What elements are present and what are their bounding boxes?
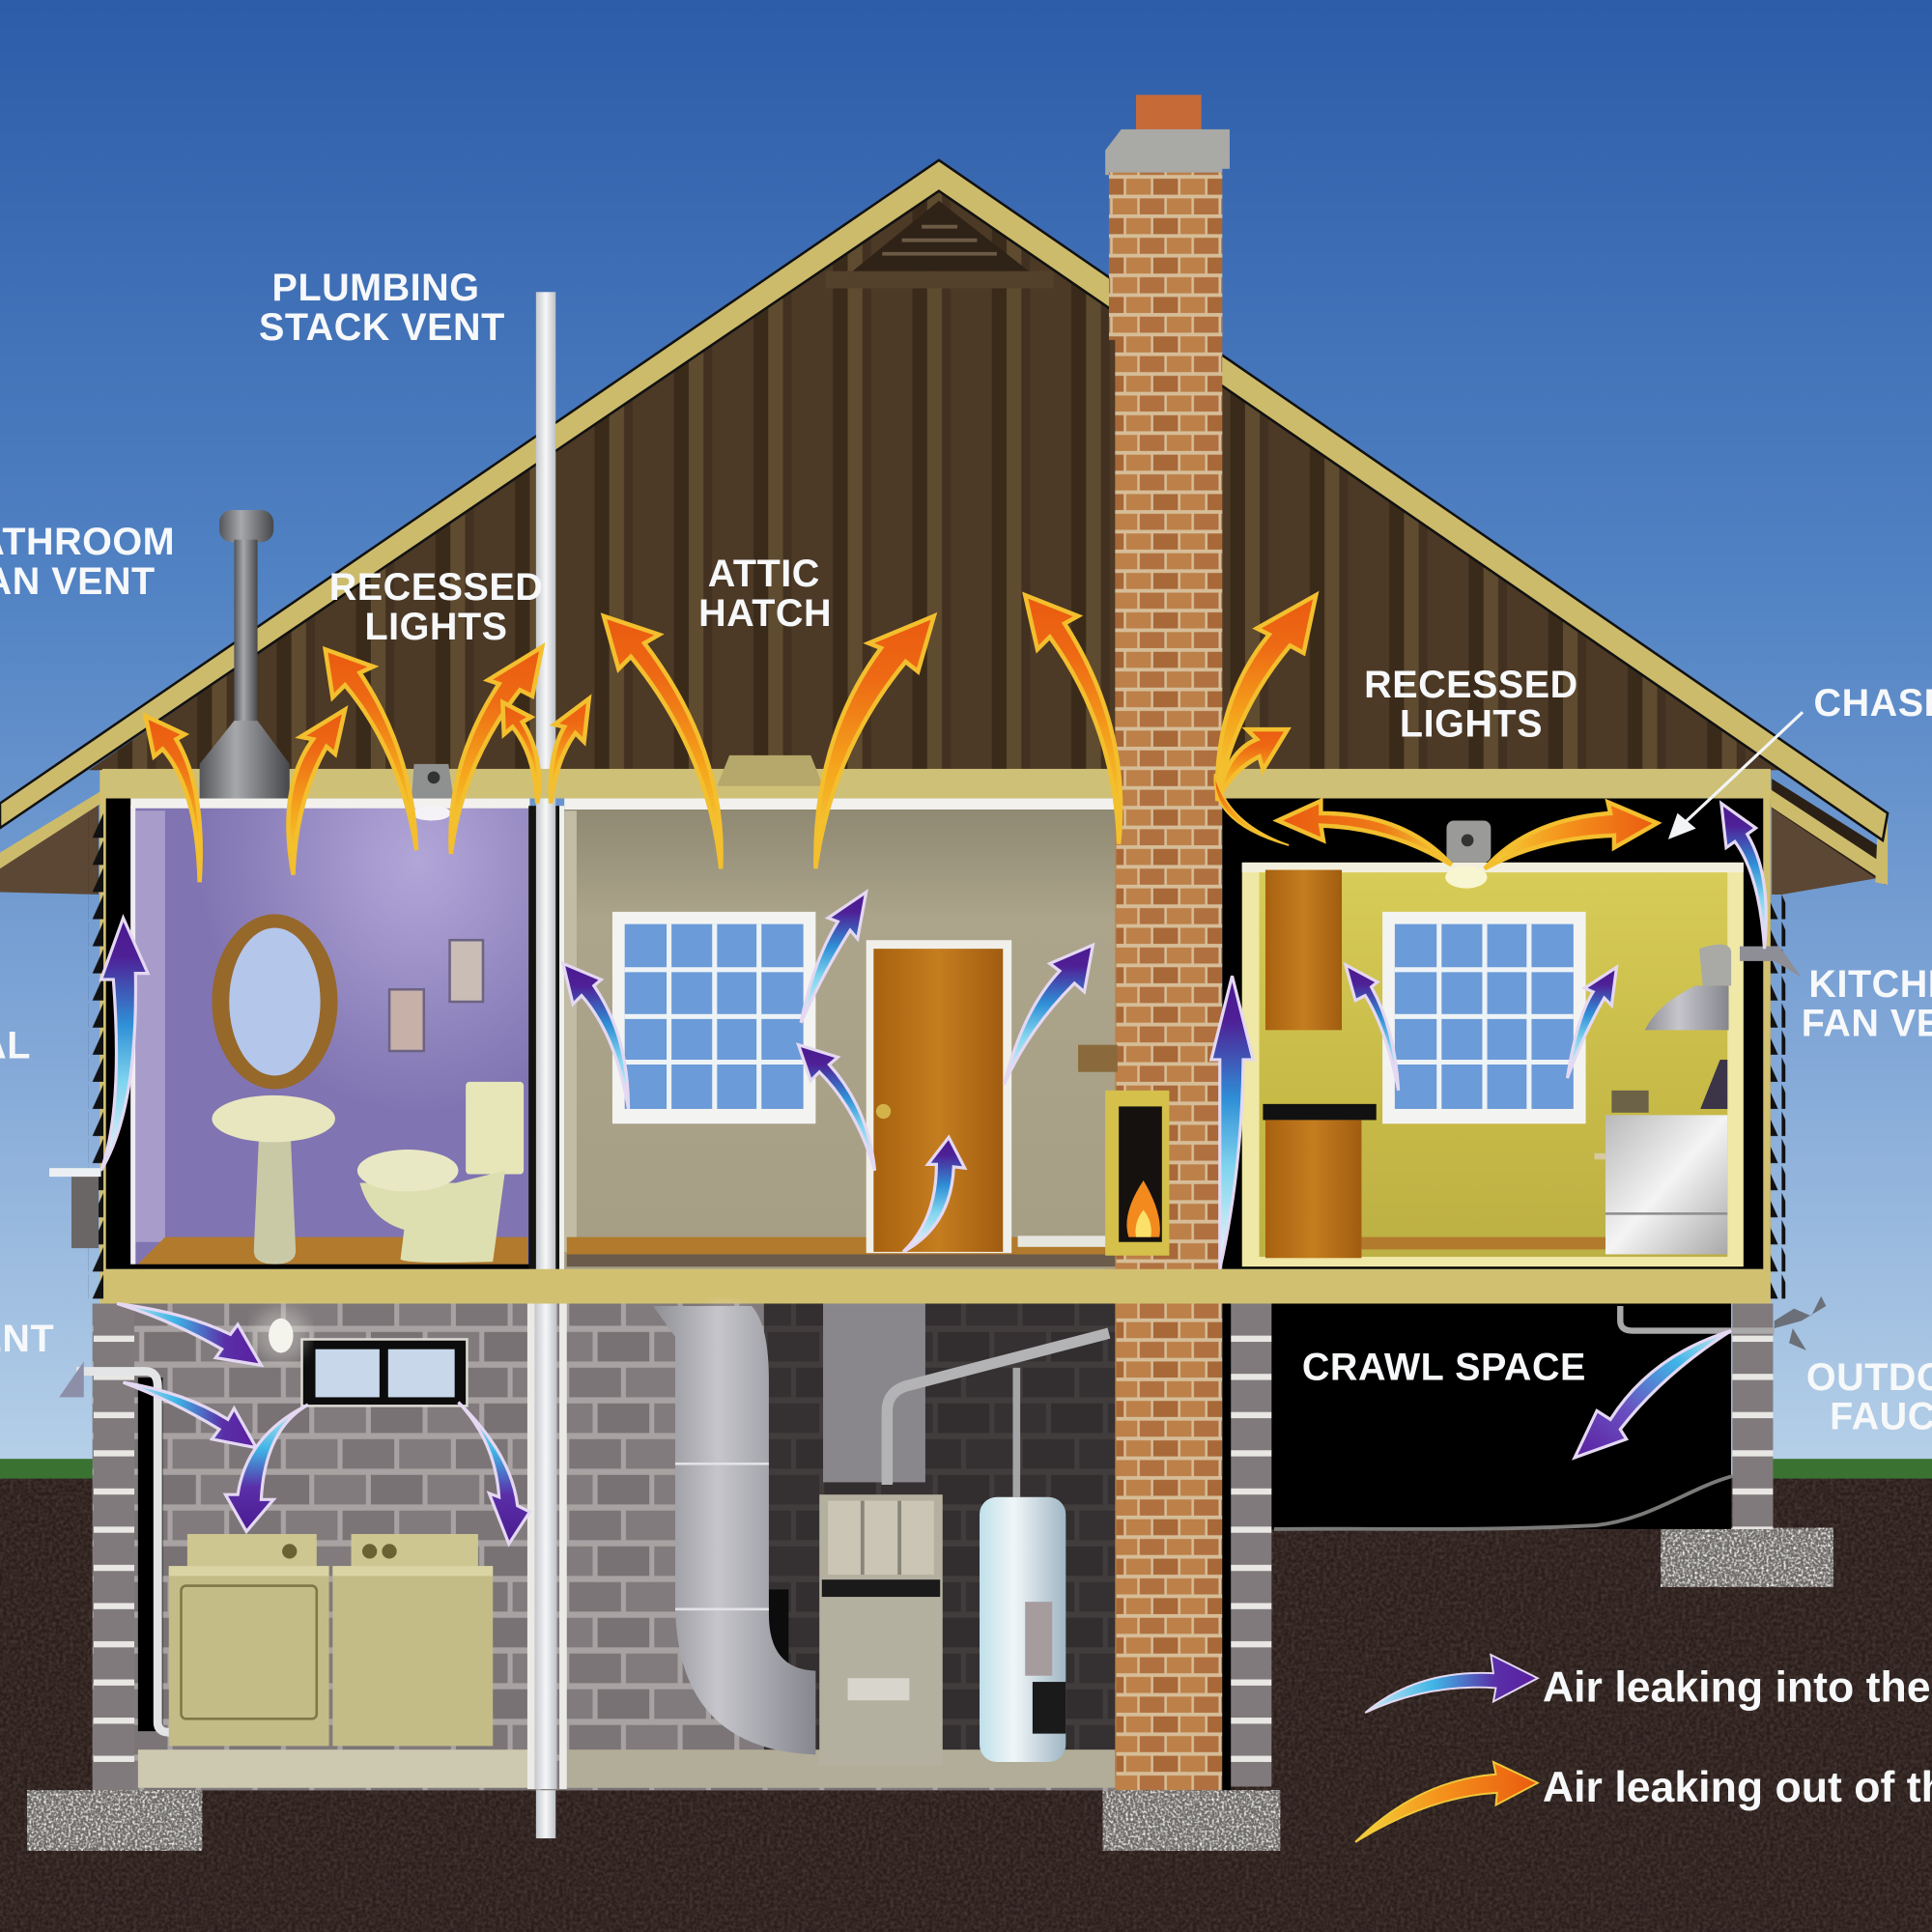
ground and soil [0, 1459, 1932, 1932]
arrow in 14 [458, 1403, 529, 1544]
arrow out 10 [1217, 595, 1316, 801]
dark furnace area [764, 1303, 1115, 1778]
stack chase [527, 1303, 567, 1789]
arrow in 10 [1721, 804, 1766, 949]
bathroom fan vent [200, 510, 290, 799]
fireplace [1105, 1091, 1169, 1256]
air leaking in arrows [101, 804, 1766, 1544]
lower cabinet [1265, 1120, 1361, 1258]
legend: air leaking out [1355, 1762, 1932, 1842]
baseboard [1361, 1237, 1608, 1249]
basement bulbs [254, 1303, 752, 1361]
water heater [980, 1497, 1065, 1762]
legend: air leaking in [1365, 1655, 1932, 1713]
mirror [212, 914, 337, 1090]
gable vent [826, 201, 1054, 288]
pedestal sink [212, 1095, 335, 1264]
label: recessed lights left: RECESSED [329, 566, 543, 609]
faucet [1775, 1296, 1826, 1350]
floor [138, 1237, 527, 1264]
plumbing stack vent pipe [536, 292, 555, 1838]
stove and pots [1595, 1060, 1727, 1254]
attic interior [89, 185, 1784, 770]
siding [89, 813, 1785, 1300]
attic hatch [717, 755, 823, 786]
arrow out 8 [815, 616, 934, 868]
basement floor [138, 1749, 1115, 1788]
dryer exterior wall vent [49, 1168, 101, 1248]
upper cabinet [1265, 870, 1342, 1030]
baseboard white strip [1018, 1236, 1112, 1247]
label: recessed lights left: LIGHTS [365, 606, 508, 648]
labels [0, 267, 1932, 1438]
chimney pot [1136, 95, 1202, 130]
panel: basement [59, 1303, 1115, 1790]
panel: kitchen [1222, 799, 1771, 1269]
arrow in 7 [1211, 976, 1253, 1269]
range hood [1645, 945, 1731, 1030]
arrow out 7 [604, 616, 722, 868]
arrow in 6 [1005, 945, 1093, 1084]
chase pointer arrow [1671, 712, 1803, 837]
legend [1355, 1655, 1932, 1842]
faucet pipe [1620, 1306, 1775, 1331]
arrow out 1 [146, 716, 201, 882]
door [867, 940, 1011, 1253]
arrow out 2 [288, 710, 345, 875]
soffit right [1772, 801, 1883, 895]
mantel [1078, 1045, 1118, 1072]
arrow in 9 [1567, 967, 1616, 1078]
recessed light fixtures [412, 764, 1491, 889]
arrow in 1 [101, 918, 148, 1171]
soffit left [0, 799, 99, 895]
foundation column [94, 1303, 134, 1786]
arrow in 4 [799, 1045, 875, 1171]
attic floor band [102, 769, 1771, 799]
arrow in 8 [1346, 965, 1399, 1091]
arrow out 14 [1485, 802, 1658, 868]
toilet [357, 1082, 524, 1263]
arrow out 9 [1025, 595, 1121, 844]
vapor barrier [1274, 1476, 1732, 1529]
first floor band [99, 770, 1771, 1303]
chimney cap [1105, 129, 1230, 175]
arrow out 3 [326, 649, 416, 850]
label: crawl space: CRAWL SPACE [1302, 1347, 1586, 1389]
counter [1263, 1104, 1377, 1120]
arrow in 15 [1575, 1331, 1731, 1458]
dryer vent duct [59, 1361, 170, 1732]
arrow in 12 [124, 1382, 256, 1448]
label: recessed lights right: RECESSED [1364, 664, 1578, 706]
label: plumbing stack vent: STACK VENT [259, 306, 505, 349]
crawl column [1231, 1303, 1271, 1786]
dryer [169, 1534, 329, 1746]
washer [332, 1534, 493, 1746]
basement window [301, 1339, 467, 1406]
house structure [0, 160, 1888, 895]
arrow out 5 [502, 702, 539, 804]
main duct [653, 1303, 925, 1754]
arrow out 11 [1217, 729, 1288, 801]
panel: bathroom [104, 799, 529, 1269]
sky background [0, 0, 1932, 1479]
outer crawl column [1732, 1303, 1773, 1529]
arrow in 11 [117, 1303, 261, 1365]
crawl space [1222, 1296, 1826, 1790]
label: recessed lights right: LIGHTS [1400, 703, 1543, 746]
arrow out 12 [1214, 774, 1289, 845]
pictures [389, 940, 483, 1051]
panel: living room [564, 799, 1118, 1269]
air leaking out arrows [146, 595, 1658, 882]
baseboard and floor [567, 1237, 1115, 1254]
furnace [819, 1494, 943, 1766]
footings [27, 1528, 1833, 1851]
kitchen fan vent cap [1740, 947, 1802, 977]
window [1382, 912, 1586, 1123]
main chimney [1105, 95, 1230, 1790]
furnace flue [887, 1333, 1109, 1485]
label: plumbing stack vent: PLUMBING [272, 267, 479, 309]
arrow in 13 [225, 1405, 308, 1531]
arrow out 6 [551, 698, 589, 804]
arrow out 13 [1278, 801, 1452, 865]
lower eave trim [0, 791, 101, 868]
arrow out 4 [450, 647, 542, 854]
window [612, 912, 815, 1123]
label: attic hatch: ATTIC [708, 553, 820, 595]
arrow in 5 [903, 1137, 965, 1252]
roof band [0, 160, 1888, 840]
arrow in 2 [563, 963, 629, 1109]
arrow in 3 [801, 892, 867, 1023]
label: attic hatch: HATCH [698, 592, 832, 635]
wall and stack chase [528, 806, 564, 1269]
